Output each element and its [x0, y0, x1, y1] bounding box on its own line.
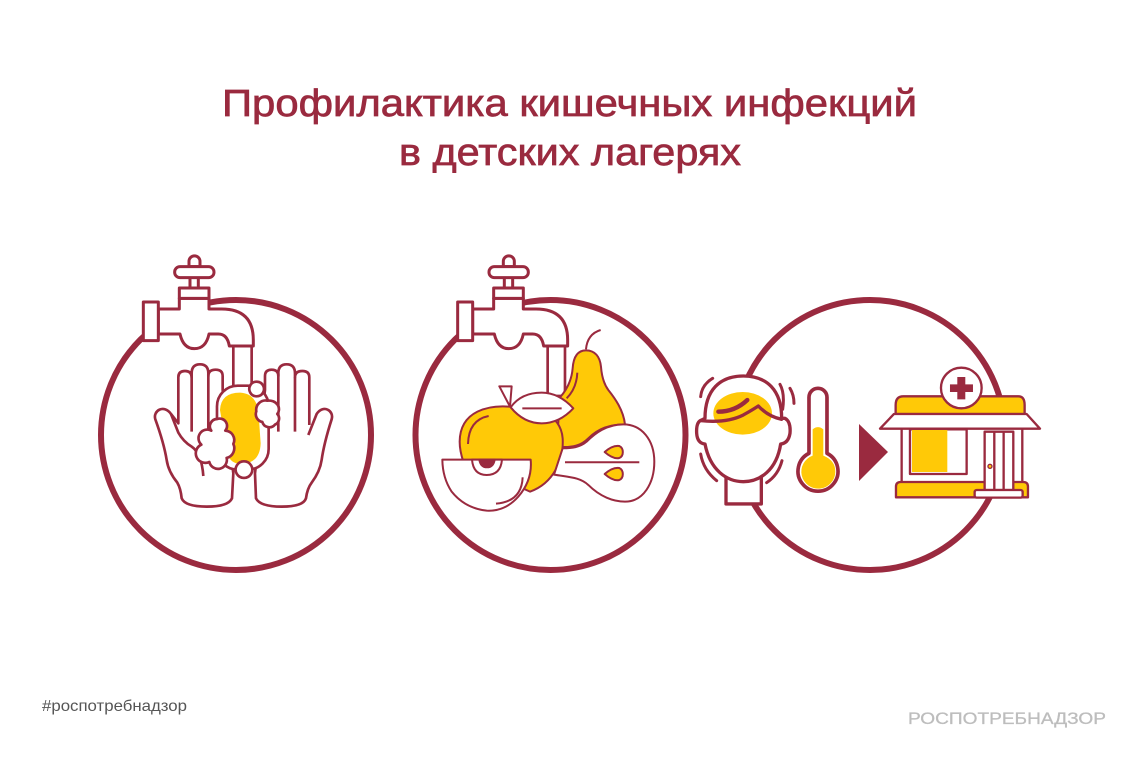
icon: water stream over fruit	[548, 346, 565, 396]
soap	[217, 386, 269, 470]
icon: thermometer	[798, 388, 838, 491]
circle: see a doctor	[735, 300, 1005, 570]
icon: medical cross badge	[941, 368, 982, 408]
soap highlight	[220, 393, 261, 464]
icon: soapy hands	[155, 346, 332, 507]
icon: pear	[557, 330, 625, 447]
hashtag: #роспотребнадзор	[42, 698, 187, 715]
icon: feverish child	[697, 376, 794, 504]
title	[222, 83, 917, 174]
icon: cut pear half	[554, 424, 654, 502]
title: Профилактика кишечных инфекций	[222, 83, 917, 125]
circle: washing fruit	[416, 300, 686, 570]
icon: clinic building	[880, 396, 1040, 498]
panel: hand washing	[101, 256, 371, 570]
panel: washing fruit	[416, 256, 686, 570]
water stream	[233, 346, 252, 390]
logo text: РОСПОТРЕБНАДЗОР	[908, 709, 1106, 728]
panel: fever and clinic	[697, 300, 1040, 570]
icon: apple slice	[442, 460, 531, 511]
arrow	[859, 424, 888, 481]
icon: water tap	[143, 256, 253, 349]
icon: apple	[460, 386, 573, 492]
icon: water tap	[458, 256, 568, 349]
circle: hand washing	[101, 300, 371, 570]
soap bubbles	[249, 382, 264, 396]
title: в детских лагерях	[399, 132, 741, 174]
